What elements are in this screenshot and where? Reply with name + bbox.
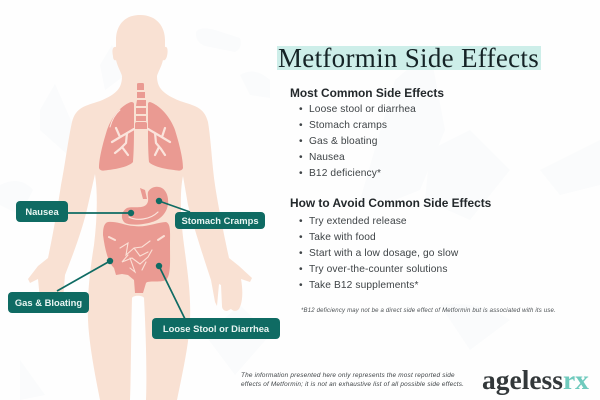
- icon: stomach: [122, 187, 168, 225]
- list item: •: [299, 168, 303, 179]
- connector lines: [57, 198, 190, 319]
- label: Nausea: Nausea: [25, 206, 59, 217]
- logo: agelessrx: agelessrx: [482, 364, 589, 395]
- list item: Try over-the-counter solutions: [309, 264, 448, 275]
- label: Stomach Cramps: [175, 212, 265, 229]
- human body silhouette: [28, 15, 252, 400]
- list item: •: [299, 232, 303, 243]
- title: Metformin Side Effects: [278, 43, 539, 73]
- label: Gas & Bloating: Gas & Bloating: [15, 297, 82, 308]
- label: Loose Stool or Diarrhea: [152, 318, 280, 339]
- list item: •: [299, 136, 303, 147]
- list item: Take with food: [309, 232, 376, 243]
- list item: •: [299, 120, 303, 131]
- list item: •: [299, 152, 303, 163]
- title highlight: [277, 46, 541, 70]
- icon: lungs and trachea: [99, 83, 183, 171]
- icon: intestines: [103, 222, 170, 293]
- list item: •: [299, 264, 303, 275]
- list item: Gas & bloating: [309, 136, 378, 147]
- list item: •: [299, 216, 303, 227]
- list item: Nausea: [309, 152, 345, 163]
- disclaimer: effects of Metformin; it is not an exhaustive list of all possible side effects.: [241, 381, 464, 388]
- disclaimer: The information presented here only represents the most reported side: [241, 372, 455, 379]
- list item: Take B12 supplements*: [309, 280, 419, 291]
- label: Loose Stool or Diarrhea: Loose Stool or Diarrhea: [163, 323, 269, 334]
- heading: how to avoid common side effects: How to Avoid Common Side Effects: [290, 196, 491, 210]
- footnote: *B12 deficiency may not be a direct side effect of Metformin but is associated with its use.: [301, 308, 556, 314]
- label: Nausea: [16, 201, 68, 222]
- disclaimer: [241, 372, 464, 388]
- heading: most common side effects: Most Common Side Effects: [290, 86, 444, 100]
- list item: Loose stool or diarrhea: [309, 104, 416, 115]
- list item: B12 deficiency*: [309, 168, 381, 179]
- list item: Start with a low dosage, go slow: [309, 248, 458, 259]
- list item: Stomach cramps: [309, 120, 387, 131]
- list item: •: [299, 248, 303, 259]
- list item: Try extended release: [309, 216, 407, 227]
- label: Stomach Cramps: Stomach Cramps: [181, 215, 259, 226]
- list item: •: [299, 104, 303, 115]
- list item: •: [299, 280, 303, 291]
- label: Gas & Bloating: [8, 292, 89, 313]
